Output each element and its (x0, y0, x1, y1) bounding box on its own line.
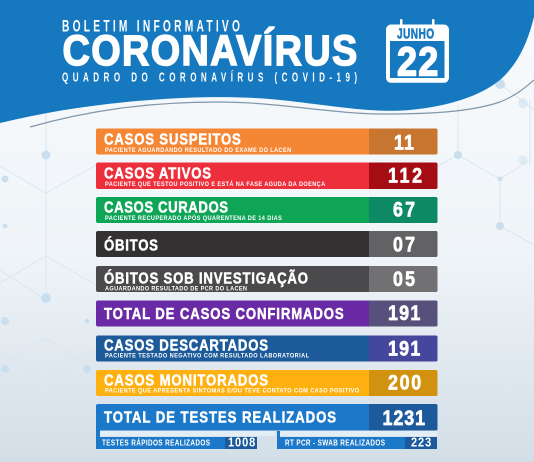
row: obitos sob investigacao: ÓBITOS SOB INVESTIGAÇÃO (104, 268, 308, 288)
row: obitos (96, 231, 438, 257)
row: casos descartados: PACIENTE TESTADO NEGATIVO COM RESULTADO LABORATORIAL (105, 352, 309, 360)
row: casos suspeitos (96, 128, 438, 155)
row: casos suspeitos: 11 (394, 131, 414, 155)
icon: calendar date: 22 (397, 39, 438, 85)
subtitle: QUADRO DO CORONAVÍRUS (COVID-19) (62, 70, 357, 85)
row: total de testes realizados: 1231 (382, 407, 425, 430)
row: casos ativos (96, 162, 438, 189)
row: casos suspeitos: PACIENTE AGUARDANDO RESULTADO DO EXAME DO LACEN (105, 146, 291, 154)
row: casos suspeitos: CASOS SUSPEITOS (104, 132, 241, 149)
row: total de testes realizados (96, 404, 438, 430)
sub-bar: testes rapidos: TESTES RÁPIDOS REALIZADOS (102, 438, 210, 448)
row: total de casos confirmados: 191 (388, 302, 420, 325)
title: coronavirus: CORONAVÍRUS (62, 26, 357, 75)
row: casos descartados (96, 336, 438, 362)
sub-bar: testes rapidos: 1008 (228, 436, 256, 450)
row: casos curados: PACIENTE RECUPERADO APÓS QUARENTENA DE 14 DIAS (105, 214, 282, 222)
row: casos ativos: 112 (388, 164, 422, 188)
header title block (62, 17, 357, 85)
row: casos ativos: PACIENTE QUE TESTOU POSITIVO E ESTÁ NA FASE AGUDA DA DOENÇA (105, 180, 326, 188)
row: casos monitorados: 200 (388, 371, 421, 395)
row: obitos: ÓBITOS (104, 235, 158, 255)
row: total de testes realizados: TOTAL DE TESTES REALIZADOS (104, 410, 336, 427)
sub-bar: rt pcr swab (277, 431, 437, 450)
row: casos curados: 67 (393, 198, 415, 222)
row: casos monitorados (96, 370, 438, 396)
row: casos ativos: CASOS ATIVOS (104, 166, 211, 183)
sub-bar: rt pcr swab: 223 (411, 436, 432, 450)
row: casos monitorados: PACIENTE QUE APRESENTA SINTOMAS E/OU TEVE CONTATO COM CASO POSITIVO (105, 387, 359, 395)
row: total de casos confirmados (96, 300, 438, 326)
sub-bar: rt pcr swab: RT PCR - SWAB REALIZADOS (285, 438, 385, 448)
row: casos curados (96, 197, 438, 223)
row: obitos: 07 (393, 233, 415, 257)
header swoosh line (30, 80, 534, 127)
row: obitos sob investigacao: 05 (393, 268, 415, 291)
row: obitos sob investigacao (96, 266, 438, 293)
row: total de casos confirmados: TOTAL DE CASOS CONFIRMADOS (104, 306, 344, 323)
row: obitos sob investigacao: AGUARDANDO RESULTADO DE PCR DO LACEN (105, 285, 247, 293)
kicker: boletim informativo: BOLETIM INFORMATIVO (62, 17, 240, 35)
icon: calendar date (386, 19, 449, 85)
header blue banner (0, 0, 534, 123)
row: casos descartados: CASOS DESCARTADOS (104, 338, 268, 355)
icon: calendar date: JUNHO (397, 26, 434, 42)
sub-bar: testes rapidos (96, 429, 275, 450)
row: casos curados: CASOS CURADOS (104, 200, 228, 217)
row: casos descartados: 191 (388, 337, 420, 361)
row: casos monitorados: CASOS MONITORADOS (104, 372, 268, 390)
